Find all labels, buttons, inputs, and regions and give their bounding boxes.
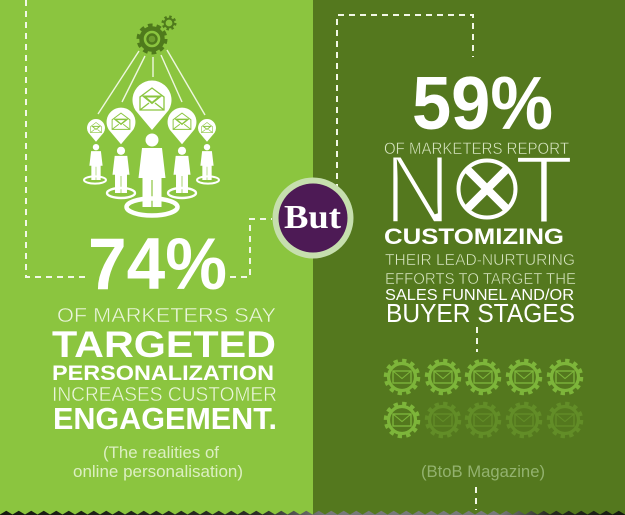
source: left: (The realities of <box>103 443 219 462</box>
chart: mail gear pictogram row 1 <box>386 361 581 393</box>
right statistic: 59%: 59% <box>412 61 553 145</box>
line: customizing: CUSTOMIZING <box>384 224 564 249</box>
panel: right background <box>313 0 625 515</box>
connector lines from gear to pins <box>98 50 205 115</box>
line: sales funnel: SALES FUNNEL AND/OR <box>385 287 574 304</box>
line: of marketers say: OF MARKETERS SAY <box>57 304 276 327</box>
icon: crossed circle <box>458 160 516 218</box>
connector: left dashed line <box>26 0 85 277</box>
source: right: (BtoB Magazine) <box>421 463 545 481</box>
icon: large gear <box>138 26 166 52</box>
letter T: T <box>514 135 574 244</box>
text block: right statement <box>384 224 576 328</box>
text block: of marketers report: OF MARKETERS REPORT <box>384 140 569 158</box>
serrated bottom edge <box>0 510 625 515</box>
chart: mail gear pictogram row 2 <box>386 404 581 436</box>
source: left <box>73 443 243 481</box>
line: efforts to target the: EFFORTS TO TARGET THE <box>385 271 576 288</box>
connector: bottom dashed line <box>475 487 477 515</box>
heading: NOT with crossed circle <box>384 135 574 244</box>
text block: left statement <box>52 304 277 436</box>
badge: But <box>272 178 354 258</box>
line: their lead-nurturing: THEIR LEAD-NURTURING <box>385 252 575 269</box>
icon: gears, envelopes and audience <box>84 17 219 215</box>
line: personalization: PERSONALIZATION <box>52 361 274 385</box>
line: buyer stages: BUYER STAGES <box>386 298 575 328</box>
panel: left background <box>0 0 313 515</box>
icon: small gear <box>163 17 175 29</box>
letter N: N <box>384 135 451 244</box>
left statistic: 74%: 74% <box>88 224 227 305</box>
connector: dashed line to gears <box>476 327 478 352</box>
icon: ground rings <box>84 176 219 216</box>
line: targeted: TARGETED <box>52 324 276 365</box>
source: left: online personalisation) <box>73 462 243 481</box>
badge: But: But <box>284 199 342 236</box>
connector: right dashed line <box>337 15 473 190</box>
line: engagement: ENGAGEMENT. <box>53 401 277 436</box>
icon: people <box>89 134 214 207</box>
line: increases customer: INCREASES CUSTOMER <box>52 383 277 406</box>
connector: dashed link from 74% to But <box>230 219 272 277</box>
icon: envelope pins <box>87 81 216 144</box>
